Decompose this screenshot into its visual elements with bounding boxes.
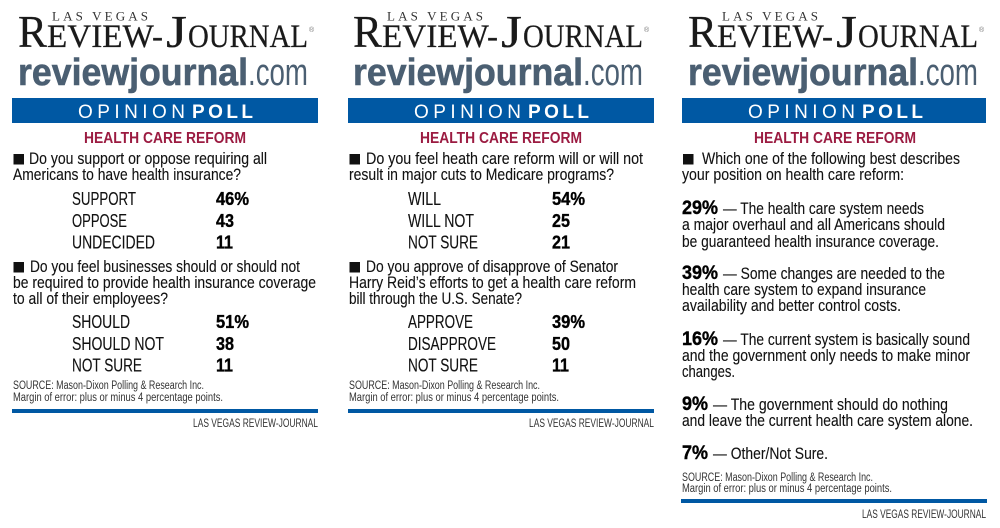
masthead logo: R bbox=[688, 7, 717, 57]
question bbox=[682, 149, 960, 184]
question 1: result in major cuts to Medicare programs? bbox=[349, 165, 614, 184]
masthead logo bbox=[353, 7, 650, 94]
question 2 bbox=[13, 257, 316, 308]
results 1: NOT SURE bbox=[408, 232, 478, 252]
masthead logo: J bbox=[836, 7, 857, 57]
result: 39%: 39% bbox=[682, 262, 718, 284]
question 2: Do you feel businesses should or should not bbox=[30, 257, 300, 276]
credit: LAS VEGAS REVIEW-JOURNAL bbox=[529, 416, 654, 430]
results 1 bbox=[72, 189, 249, 252]
opinion poll banner: POLL bbox=[862, 102, 923, 123]
results 1: SUPPORT bbox=[72, 189, 136, 209]
result: 39% bbox=[682, 262, 945, 315]
question 2: bill through the U.S. Senate? bbox=[349, 289, 522, 308]
panel: poll on Medicare and Senator Reid bbox=[348, 7, 654, 430]
result: 29%: a major overhaul and all Americans should bbox=[682, 215, 945, 234]
results 2: 51% bbox=[216, 312, 249, 332]
masthead logo: LAS VEGAS bbox=[387, 8, 483, 24]
source note: SOURCE: Mason-Dixon Polling & Research Inc. bbox=[13, 380, 204, 392]
masthead logo bbox=[18, 7, 315, 94]
result: 7%: — Other/Not Sure. bbox=[713, 444, 828, 463]
results 1: 21 bbox=[552, 232, 570, 252]
source note: SOURCE: Mason-Dixon Polling & Research Inc. bbox=[349, 380, 540, 392]
opinion poll banner: OPINION bbox=[748, 102, 855, 123]
result: 16%: 16% bbox=[682, 328, 718, 350]
masthead logo: EVIEW- bbox=[47, 19, 163, 55]
results 1: 54% bbox=[552, 189, 585, 209]
results 1: OPPOSE bbox=[72, 211, 127, 231]
results 2: DISAPPROVE bbox=[408, 334, 496, 354]
masthead logo: .com bbox=[918, 52, 978, 94]
masthead logo: reviewjournal bbox=[688, 52, 918, 94]
credit: LAS VEGAS REVIEW-JOURNAL bbox=[193, 416, 318, 430]
result: 9%: 9% bbox=[682, 393, 708, 415]
result: 9%: — The government should do nothing bbox=[713, 395, 948, 414]
result: 29%: 29% bbox=[682, 197, 718, 219]
panel: poll on insurance requirement bbox=[12, 7, 318, 430]
results 2: APPROVE bbox=[408, 312, 473, 332]
opinion poll banner: OPINION bbox=[414, 102, 521, 123]
results 2: SHOULD NOT bbox=[72, 334, 164, 354]
question 2: be required to provide health insurance coverage bbox=[13, 273, 316, 292]
masthead logo: reviewjournal bbox=[18, 52, 248, 94]
masthead logo: EVIEW- bbox=[382, 19, 498, 55]
results 1: 46% bbox=[216, 189, 249, 209]
results 2 bbox=[408, 312, 585, 376]
result: 39%: health care system to expand insurance bbox=[682, 280, 926, 299]
masthead logo bbox=[688, 7, 985, 94]
masthead logo: ® bbox=[644, 26, 650, 34]
result: 29%: be guaranteed health insurance coverage. bbox=[682, 232, 939, 251]
results 1: WILL bbox=[408, 189, 441, 209]
results 2: 39% bbox=[552, 312, 585, 332]
results 2 bbox=[72, 312, 249, 376]
results 2: SHOULD bbox=[72, 312, 130, 332]
result: 9% bbox=[682, 393, 973, 430]
result: 29%: — The health care system needs bbox=[723, 199, 924, 218]
results 2: 50 bbox=[552, 334, 570, 354]
question 1: Do you support or oppose requiring all bbox=[29, 149, 267, 168]
question 1: Do you feel heath care reform will or will not bbox=[366, 149, 643, 168]
results 1: 11 bbox=[216, 232, 233, 252]
question: your position on health care reform: bbox=[682, 165, 904, 184]
masthead logo: OURNAL bbox=[523, 19, 643, 55]
source note bbox=[349, 380, 559, 404]
heading: HEALTH CARE REFORM bbox=[420, 130, 582, 147]
masthead logo: OURNAL bbox=[858, 19, 978, 55]
source note bbox=[13, 380, 223, 404]
masthead logo: R bbox=[18, 7, 47, 57]
source note: Margin of error: plus or minus 4 percentage points. bbox=[349, 392, 559, 404]
result: 7%: 7% bbox=[682, 442, 708, 464]
result: 7% bbox=[682, 442, 828, 464]
question 1 bbox=[13, 149, 267, 184]
masthead logo: ® bbox=[309, 26, 315, 34]
source note bbox=[682, 472, 892, 495]
result: 16%: changes. bbox=[682, 362, 735, 381]
opinion poll banner bbox=[12, 98, 318, 123]
opinion poll banner: POLL bbox=[528, 102, 589, 123]
results 1: UNDECIDED bbox=[72, 232, 155, 252]
opinion poll banner: OPINION bbox=[78, 102, 185, 123]
question 1 bbox=[349, 149, 643, 184]
question 1: Americans to have health insurance? bbox=[13, 165, 241, 184]
masthead logo: J bbox=[501, 7, 522, 57]
masthead logo: LAS VEGAS bbox=[52, 8, 148, 24]
results 2: 11 bbox=[552, 356, 569, 376]
results 1: WILL NOT bbox=[408, 211, 474, 231]
masthead logo: J bbox=[166, 7, 187, 57]
results 1 bbox=[408, 189, 585, 252]
masthead logo: LAS VEGAS bbox=[722, 8, 818, 24]
question 2: Harry Reid’s efforts to get a health care reform bbox=[349, 273, 636, 292]
masthead logo: ® bbox=[979, 26, 985, 34]
opinion poll banner bbox=[682, 98, 986, 123]
question 2: Do you approve of disapprove of Senator bbox=[366, 257, 618, 276]
opinion poll banner bbox=[348, 98, 654, 123]
masthead logo: EVIEW- bbox=[717, 19, 833, 55]
result: 29% bbox=[682, 197, 945, 251]
heading: HEALTH CARE REFORM bbox=[754, 130, 916, 147]
results 1: 43 bbox=[216, 211, 234, 231]
masthead logo: OURNAL bbox=[188, 19, 308, 55]
masthead logo: reviewjournal bbox=[353, 52, 583, 94]
result: 39%: availability and better control costs. bbox=[682, 296, 901, 315]
results 2: 38 bbox=[216, 334, 234, 354]
results 2: NOT SURE bbox=[408, 356, 478, 376]
result: 16% bbox=[682, 328, 970, 381]
masthead logo: R bbox=[353, 7, 382, 57]
masthead logo: .com bbox=[583, 52, 643, 94]
question 2: to all of their employees? bbox=[13, 289, 168, 308]
source note: Margin of error: plus or minus 4 percentage points. bbox=[682, 483, 892, 495]
results 1: 25 bbox=[552, 211, 570, 231]
source note: Margin of error: plus or minus 4 percentage points. bbox=[13, 392, 223, 404]
masthead logo: .com bbox=[248, 52, 308, 94]
results 2: NOT SURE bbox=[72, 356, 142, 376]
results 2: 11 bbox=[216, 356, 233, 376]
heading: HEALTH CARE REFORM bbox=[84, 130, 246, 147]
panel: position on health care reform bbox=[681, 7, 987, 521]
result: 39%: — Some changes are needed to the bbox=[723, 264, 945, 283]
opinion poll banner: POLL bbox=[192, 102, 253, 123]
source note: SOURCE: Mason-Dixon Polling & Research Inc. bbox=[682, 472, 873, 484]
question 2 bbox=[349, 257, 636, 308]
